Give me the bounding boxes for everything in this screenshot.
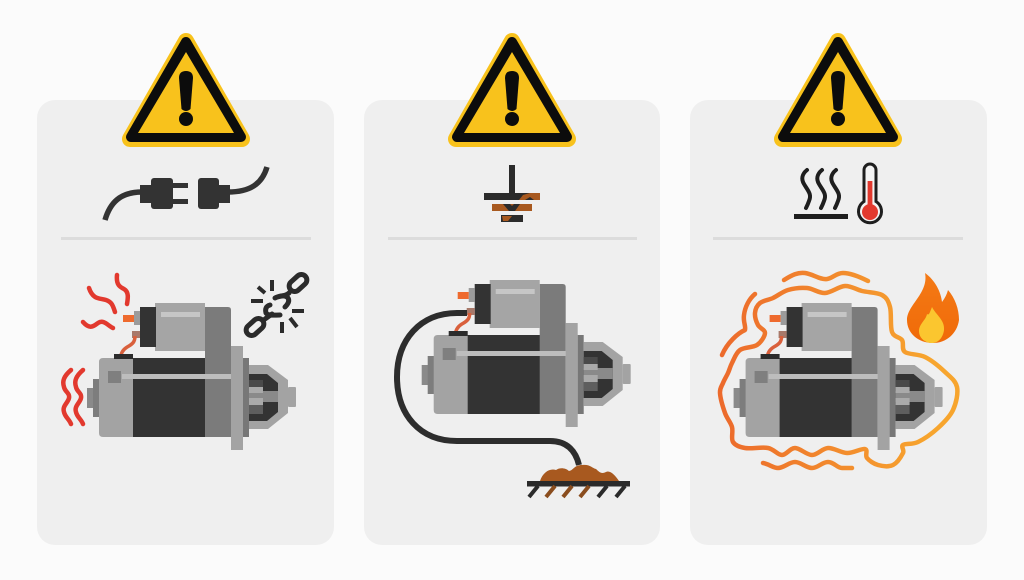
panel: overheating (690, 100, 987, 545)
icon: broken chain (244, 272, 309, 338)
panel: loose connection (37, 100, 334, 545)
icon: thermometer (858, 164, 882, 223)
panel: bad ground (364, 100, 660, 545)
starter motor 3 (734, 303, 943, 450)
icon: warning triangle 1 (130, 41, 242, 139)
icon: unplugged connector (105, 167, 267, 220)
icon: flame (907, 273, 959, 343)
icon: rusty ground symbol (484, 165, 540, 222)
icon: red vibration lines (63, 275, 128, 424)
ground cable (397, 313, 579, 465)
starter motor 2 (422, 280, 631, 427)
icon: warning triangle 2 (456, 41, 568, 139)
icon: corroded ground point (527, 465, 630, 497)
icon: heat waves (794, 170, 848, 219)
heat halo around motor (720, 273, 957, 468)
starter motor 1 (87, 303, 296, 450)
icon: warning triangle 3 (782, 41, 894, 139)
